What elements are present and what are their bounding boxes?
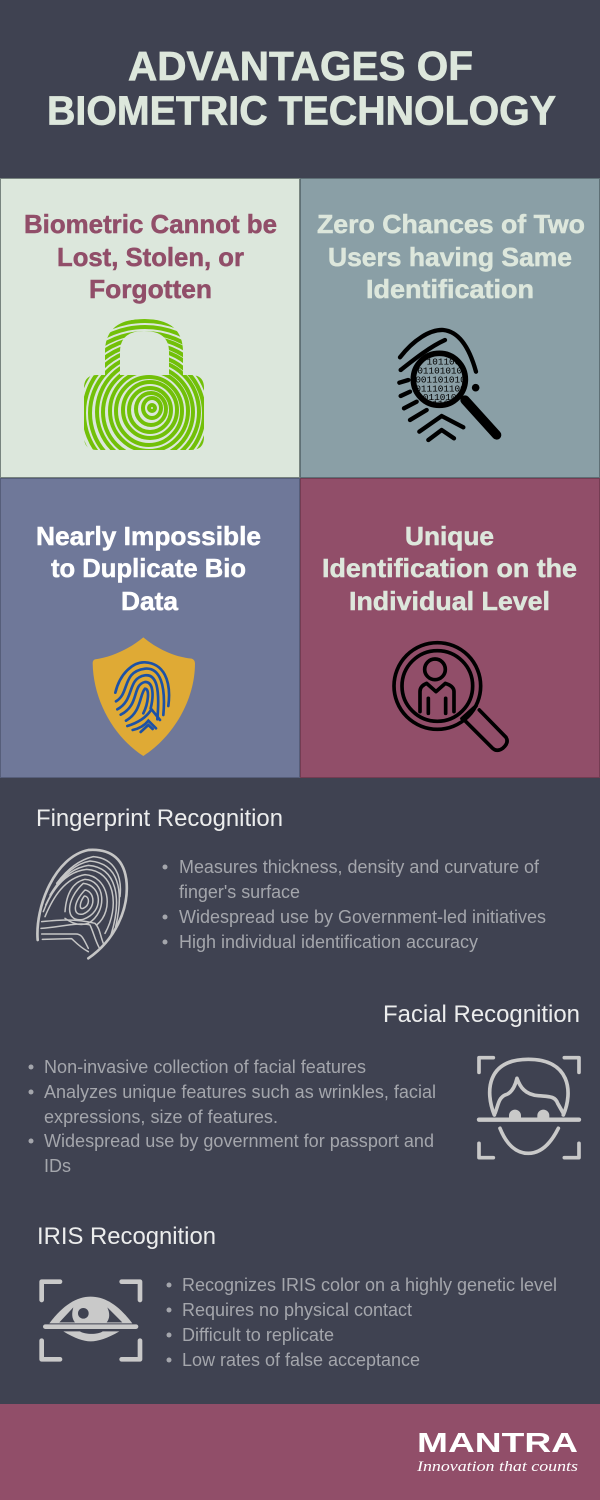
title [47, 43, 556, 134]
icon: fingerprint padlock [84, 319, 204, 450]
bullet list: fingerprint: finger's surface [179, 882, 300, 902]
heading: cannot be lost [24, 209, 277, 304]
icon: magnifier over fingerprint and binary: 001101010 [415, 374, 466, 385]
heading: cannot be lost: Forgotten [89, 274, 212, 304]
icon: magnifier over fingerprint and binary: 00110101 [417, 392, 463, 403]
section: fingerprint recognition [36, 805, 546, 958]
heading: fingerprint recognition: Fingerprint Recognition [36, 805, 283, 832]
logo: Mantra [416, 1427, 578, 1475]
bullet list: fingerprint: High individual identification accuracy [179, 932, 478, 952]
heading: impossible to duplicate: Data [121, 586, 179, 616]
footer band [0, 1404, 600, 1500]
heading: facial recognition: Facial Recognition [383, 1001, 580, 1028]
bullet list: facial: Non-invasive collection of facial features [44, 1057, 366, 1077]
heading: unique identification: Unique [405, 521, 494, 551]
bullet list: fingerprint: Widespread use by Government-led initiatives [179, 907, 546, 927]
heading: impossible to duplicate: Nearly Impossible [36, 521, 261, 551]
icon: magnifier over fingerprint and binary: 01101010 [417, 365, 463, 376]
heading: cannot be lost: Lost, Stolen, or [57, 242, 244, 272]
panel: impossible to duplicate [0, 478, 300, 778]
icon: magnifier over fingerprint and binary: 011101100 [415, 383, 466, 394]
icon: fingerprint [37, 850, 127, 958]
heading: zero chances: Identification [366, 274, 534, 304]
bullet list: facial [28, 1057, 436, 1176]
bullet list: facial: expressions, size of features. [44, 1107, 278, 1127]
title: BIOMETRIC TECHNOLOGY [47, 88, 556, 134]
icon: magnifier over person [394, 643, 507, 750]
heading: impossible to duplicate: to Duplicate Bio [51, 553, 246, 583]
bullet list: facial: IDs [44, 1156, 71, 1176]
heading: unique identification [322, 521, 577, 616]
bullet list: fingerprint: Measures thickness, density and curvature of [179, 857, 540, 877]
bullet list: iris: Low rates of false acceptance [182, 1350, 420, 1370]
bullet list: iris: Requires no physical contact [182, 1300, 412, 1320]
icon: magnifier over fingerprint and binary [399, 330, 497, 440]
heading: cannot be lost: Biometric Cannot be [24, 209, 277, 239]
icon: magnifier over fingerprint and binary: 101100 [427, 356, 461, 367]
section: iris recognition [37, 1223, 557, 1370]
title: ADVANTAGES OF [128, 43, 473, 89]
heading: unique identification: Identification on the [322, 553, 577, 583]
panel: zero chances [300, 178, 600, 478]
heading: zero chances [317, 209, 585, 304]
icon: fingerprint shield [93, 637, 195, 756]
bullet list: facial: Widespread use by government for passport and [44, 1131, 434, 1151]
panel: cannot be lost [0, 178, 300, 509]
bullet list: facial: Analyzes unique features such as wrinkles, facial [44, 1082, 436, 1102]
logo: Mantra: MANTRA [417, 1427, 578, 1458]
section: facial recognition [28, 1001, 580, 1176]
heading: unique identification: Individual Level [349, 586, 550, 616]
heading: zero chances: Zero Chances of Two [317, 209, 585, 239]
bullet list: fingerprint [162, 857, 546, 952]
icon: magnifier over fingerprint and binary: 01100 [427, 399, 455, 410]
heading: zero chances: Users having Same [328, 242, 572, 272]
logo: Mantra: Innovation that counts [416, 1459, 578, 1475]
bullet list: iris [166, 1275, 557, 1370]
bullet list: iris: Difficult to replicate [182, 1325, 334, 1345]
icon: eye scan [42, 1282, 140, 1359]
heading: iris recognition: IRIS Recognition [37, 1223, 216, 1250]
icon: face scan [479, 1058, 579, 1158]
panel: unique identification [300, 478, 600, 778]
heading: impossible to duplicate [36, 521, 261, 616]
bullet list: iris: Recognizes IRIS color on a highly genetic level [182, 1275, 557, 1295]
